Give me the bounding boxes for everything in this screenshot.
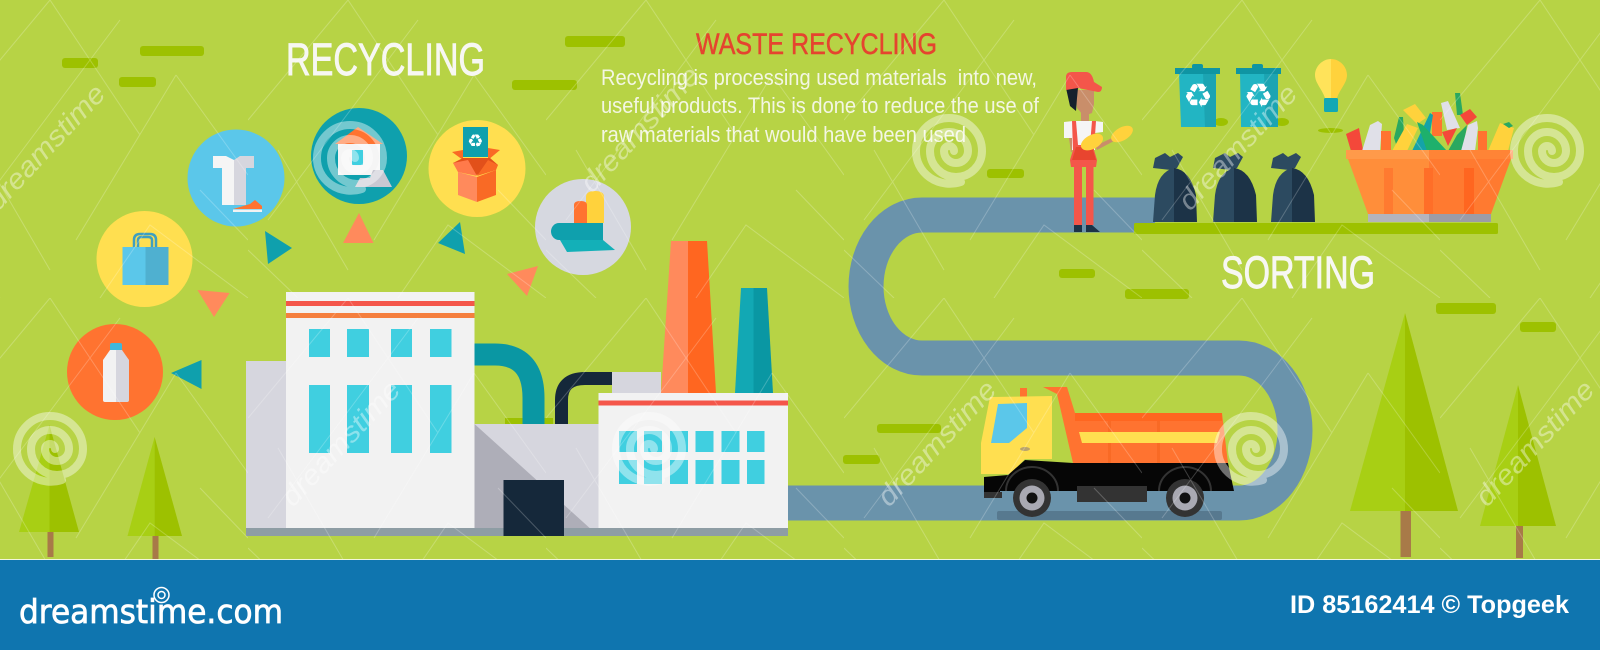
cap (1066, 72, 1102, 92)
neck (1081, 112, 1089, 124)
dump bed (1043, 387, 1228, 463)
watermark text: dreamstime (275, 374, 407, 512)
grass dashes (62, 36, 1556, 464)
cab window (991, 403, 1027, 443)
garbage bag 3 (1271, 153, 1315, 222)
garbage bag 1 (1153, 153, 1197, 222)
yellow stripe (1079, 432, 1220, 443)
right building (598, 393, 788, 528)
overalls (1070, 121, 1097, 167)
tree 4 (1480, 385, 1556, 558)
watermark text: dreamstime (574, 60, 706, 198)
icon circle: material rolls (535, 179, 631, 275)
shirt and sleeves (1064, 121, 1103, 150)
gloves (1108, 122, 1136, 146)
shoes (1074, 225, 1100, 232)
arrow: to shirt (265, 231, 292, 264)
arrow: to rolls (507, 266, 538, 296)
front wheel (1013, 479, 1051, 517)
icon circle: recycling box: ♻ (467, 131, 484, 152)
icon circle: bottle (67, 324, 163, 420)
base strip (246, 528, 788, 536)
tree 3 (1350, 313, 1458, 557)
arrow: to bottle (171, 360, 202, 389)
description text (601, 65, 1040, 147)
watermark text: dreamstime (1172, 78, 1304, 216)
dump truck (981, 387, 1234, 520)
recycling bin 2: ♻ (1244, 76, 1273, 115)
cab (981, 396, 1052, 474)
worker (1064, 72, 1136, 232)
pipes (474, 354, 612, 424)
arrow: to bag (198, 290, 230, 317)
light bulb (1315, 59, 1347, 133)
door (504, 480, 564, 536)
watermark text: dreamstime (1469, 374, 1600, 512)
footer logo: dreamstime.com: dreamstime.com (19, 592, 283, 631)
description text: useful products. This is done to reduce the use of (601, 93, 1040, 118)
footer credit: ID 85162414 © Topgeek (1290, 591, 1569, 619)
face (1075, 90, 1094, 115)
icon circle: recycling box (428, 120, 526, 217)
main building (286, 292, 474, 528)
fuel tank (1077, 486, 1147, 502)
arrow: to box (438, 222, 465, 254)
middle building (474, 424, 598, 536)
garbage bag 2 (1213, 153, 1257, 222)
heading: sorting: SORTING (1221, 247, 1375, 298)
description text: raw materials that would have been used (601, 122, 966, 147)
legs (1074, 165, 1082, 225)
icon circle: shirt and shoe (188, 130, 284, 226)
description text: Recycling is processing used materials into new, (601, 65, 1037, 90)
sorting ledge (1134, 223, 1498, 234)
chassis (984, 460, 1234, 498)
tree 2 (128, 437, 182, 559)
heading: recycling: RECYCLING (286, 34, 485, 85)
bottles in basket (1346, 93, 1514, 151)
icon circle: house and bricks (311, 108, 407, 204)
rear wheel (1166, 479, 1204, 517)
watermark text (0, 60, 1600, 512)
watermark text: dreamstime (871, 374, 1003, 512)
recycling bin 1 (1175, 64, 1228, 127)
chimney: teal (735, 288, 773, 393)
arrow: to house (343, 213, 374, 243)
basket (1346, 150, 1513, 222)
recycling bin 1: ♻ (1183, 76, 1213, 115)
watermark spirals (17, 118, 1580, 482)
heading: waste recycling: WASTE RECYCLING (696, 28, 937, 61)
truck shadow (997, 511, 1222, 520)
winding road (786, 215, 1295, 503)
recycling bin 2 (1236, 64, 1289, 127)
hair (1066, 88, 1078, 111)
exhaust (1020, 388, 1027, 397)
left annex (246, 361, 286, 528)
fenders (1006, 467, 1211, 491)
chimney: orange (661, 241, 716, 393)
icon circle: shopping bag (96, 211, 192, 307)
arms (1069, 138, 1114, 152)
factory (246, 241, 788, 536)
footer band (0, 559, 1600, 650)
tree 1 (19, 425, 79, 557)
